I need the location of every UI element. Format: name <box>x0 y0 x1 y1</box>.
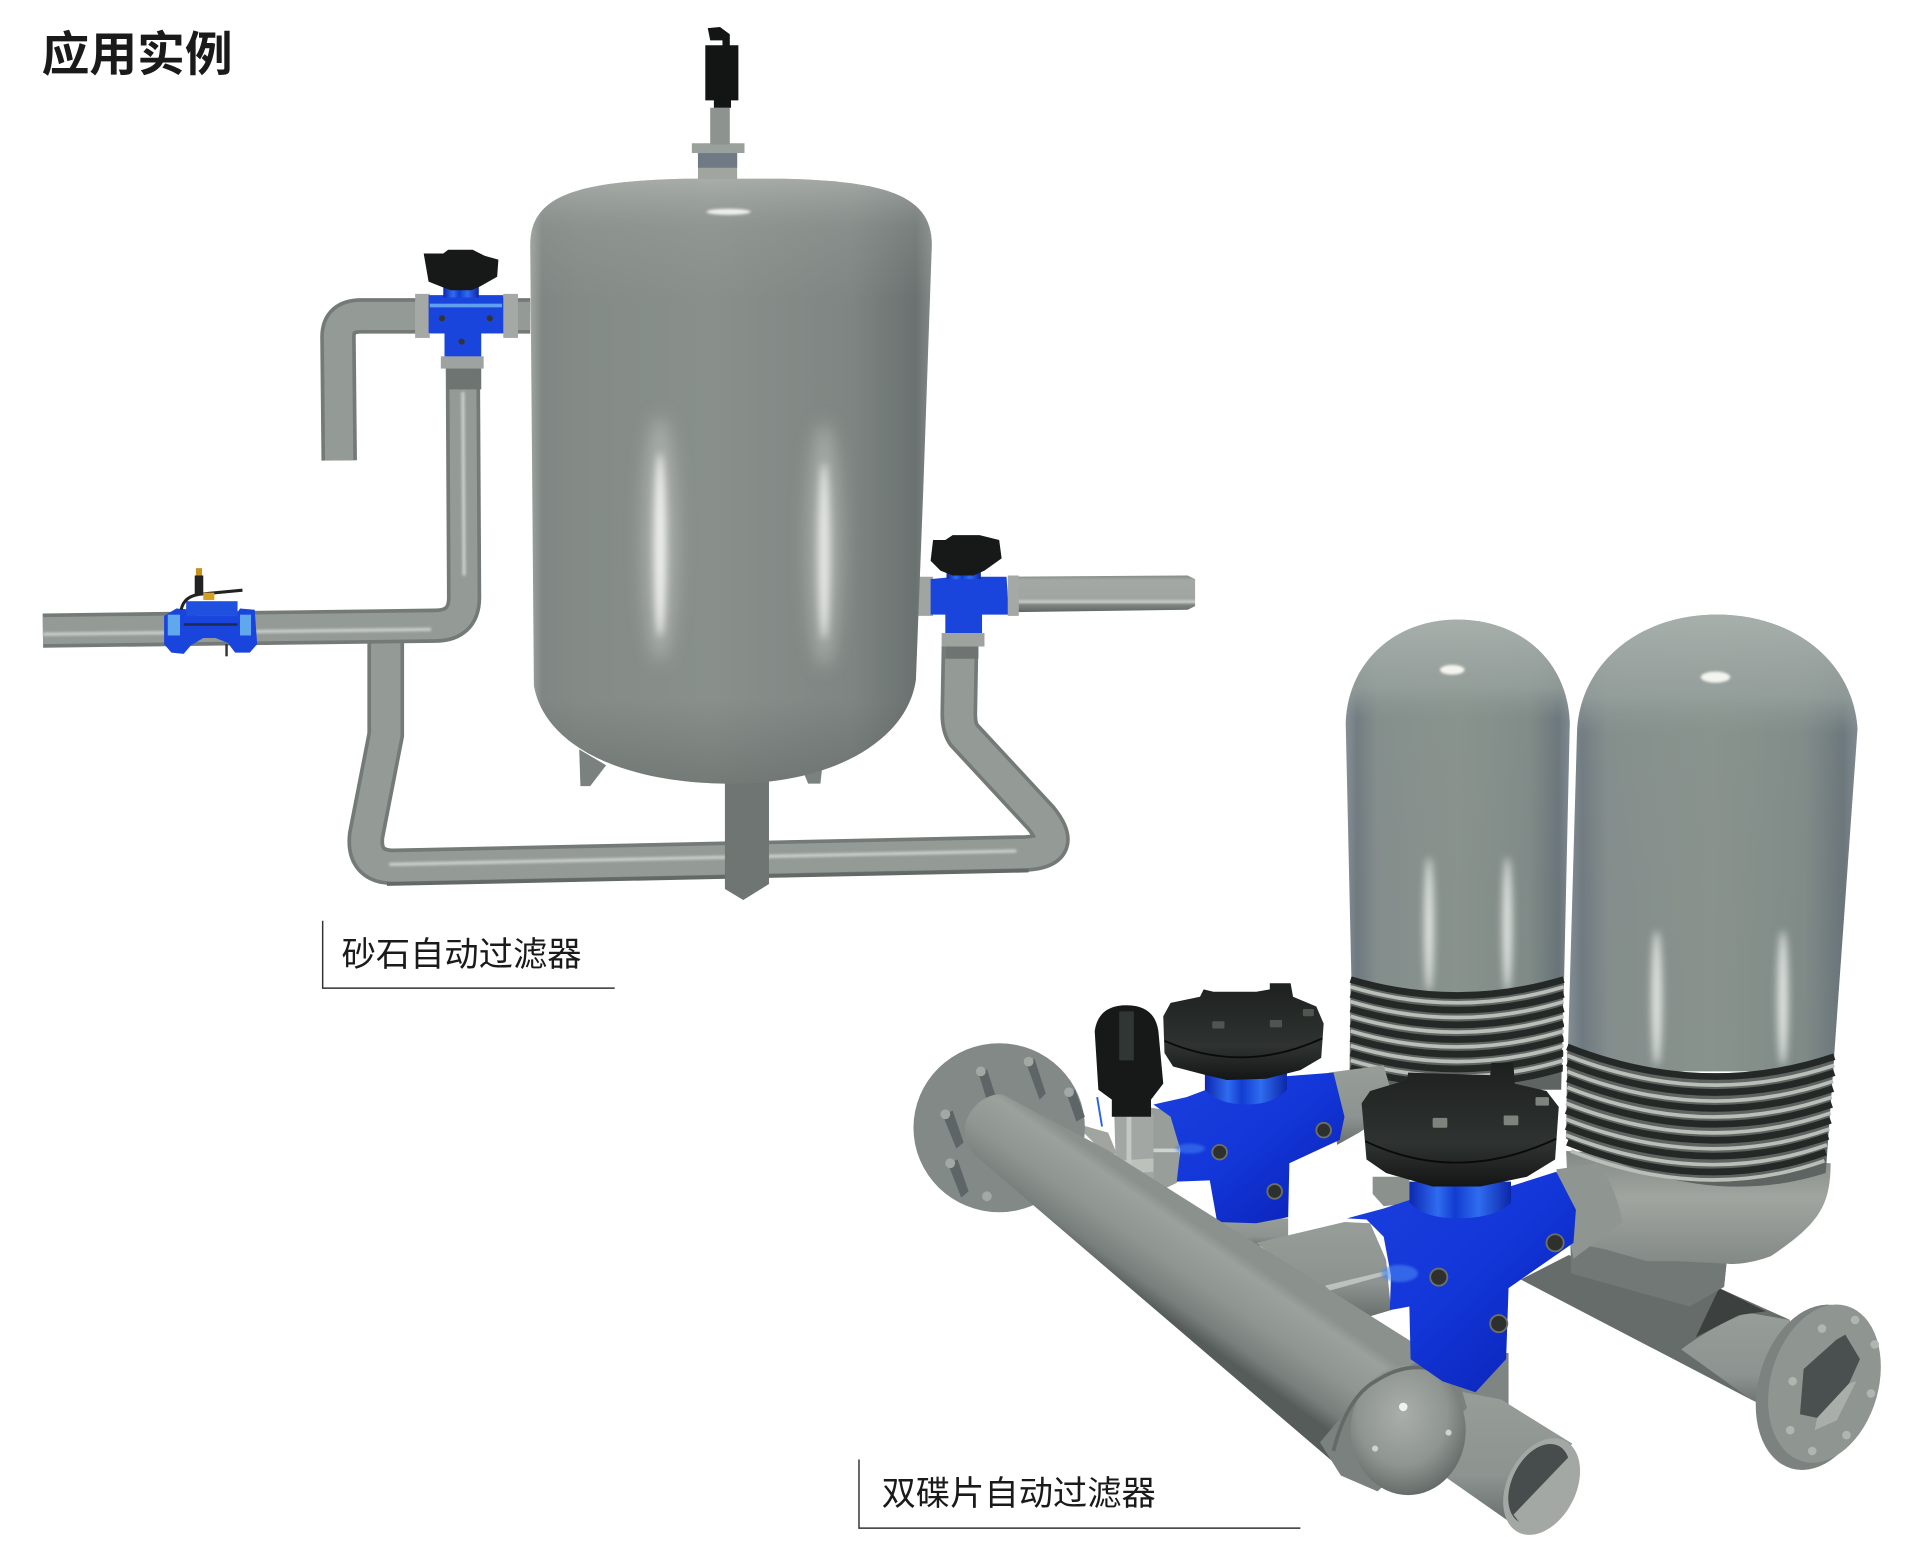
title: 应用实例 <box>42 29 233 82</box>
front vessel threads <box>1566 1047 1834 1187</box>
pipe: backwash outlet elbow <box>338 309 530 460</box>
pipe: outlet right <box>1010 575 1195 612</box>
pipe: left to back valve <box>1074 1107 1180 1198</box>
vent: stem and flange <box>692 108 744 181</box>
back diaphragm valve <box>1153 983 1344 1223</box>
disc filter assembly <box>913 615 1899 1548</box>
pipe: cross connector <box>1256 1222 1391 1316</box>
valve: inline control valve <box>164 568 257 656</box>
stub to tank at right <box>913 577 933 616</box>
pipe: front valve to front vessel <box>1556 1163 1622 1259</box>
back valve cap <box>1163 983 1324 1080</box>
front valve cap <box>1362 1063 1559 1186</box>
valve: top left <box>415 250 518 389</box>
open outlet pipe <box>1420 1353 1596 1548</box>
caption: sand filter <box>323 921 615 988</box>
gray fitting under front cap <box>1373 1177 1409 1206</box>
back vessel threads <box>1349 980 1564 1090</box>
front diaphragm valve <box>1347 1063 1576 1392</box>
manifold end cap <box>1320 1362 1467 1495</box>
front vessel base <box>1566 1151 1831 1306</box>
rear outlet pipe <box>1521 1255 1790 1408</box>
long horizontal manifold <box>965 1094 1451 1463</box>
tank body <box>530 179 932 784</box>
pipe: back valve to back vessel <box>1329 1065 1396 1145</box>
caption: disc filter <box>859 1460 1300 1528</box>
sand filter assembly <box>43 27 1195 900</box>
tank legs <box>579 749 823 786</box>
rear flange <box>1737 1291 1899 1484</box>
front vessel <box>1561 615 1858 1163</box>
caption: disc filter: 双碟片自动过滤器 <box>882 1475 1156 1513</box>
caption: sand filter: 砂石自动过滤器 <box>342 936 582 974</box>
small air valve <box>1095 1005 1163 1200</box>
valve: right <box>931 535 1019 659</box>
pipe: lower bypass loop <box>366 643 1051 884</box>
drain under tank <box>725 779 769 900</box>
tank highlights <box>707 209 751 215</box>
back vessel <box>1346 620 1570 998</box>
left flange <box>913 1043 1085 1212</box>
vent: black air valve <box>705 27 738 108</box>
pipe: under back valve <box>1216 1218 1288 1246</box>
pipe: main line to vertical riser <box>43 367 464 634</box>
